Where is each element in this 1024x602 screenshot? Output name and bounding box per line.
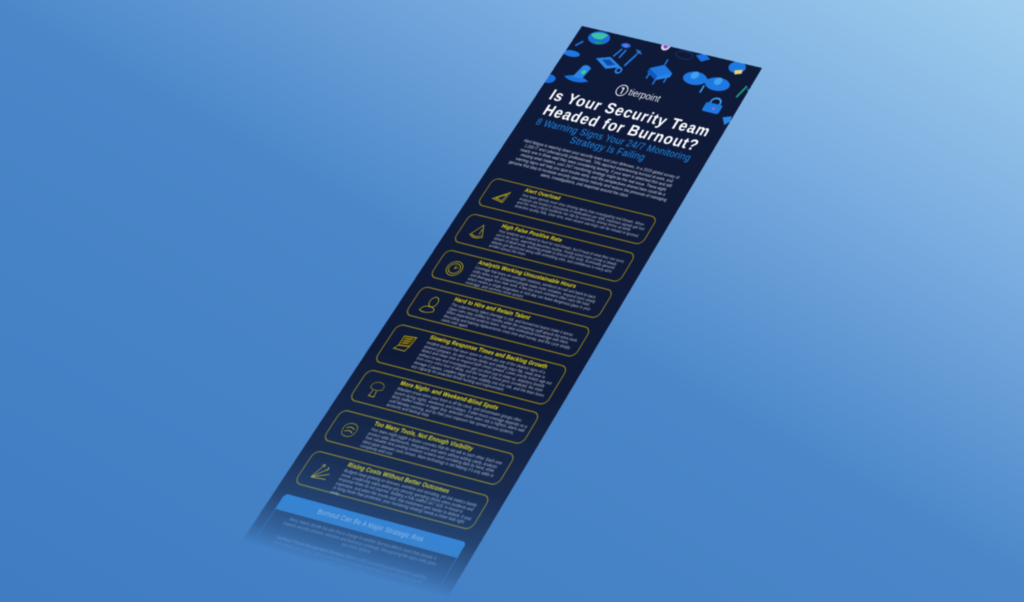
card heading: Alert Overload (523, 187, 562, 201)
card text: Your analysts are trained to hunt for real threats, but if most of what they see turns out to be noise, searching becomes routine. Poorly tuned rules create a steady stream of dead ends, teaching people to distrust their tools. Eventually genuine attacks get dismissed along with everything else, and confidence in every alert erodes across the team. (488, 229, 625, 274)
icon: cut-off device on left edge (544, 74, 556, 84)
card 4: hard to hire and retain talent (404, 285, 592, 358)
icon: spreading arrows (310, 464, 330, 480)
section text: TierPoint Threat Management Services deliver a 24/7 monitoring and response capability that extends your team, reduces alert fatigue and gives your analysts room to focus on the work that matters most. (272, 535, 428, 585)
card text: Incident queues that never seem to shrink are one of the clearest signs of a strained program. As alert volume climbs and staffing stays flat, mean time to detect and mean time to respond both creep upward. Lower priority tickets age out without review and investigations get cut short just to keep up. Attackers benefit from every extra hour of delay, and the longer a threat goes unnoticed, the more damage it causes. Leaders begin to lose visibility into true risk, and the team loses any capacity for proactive threat hunting and improvement. (410, 340, 553, 398)
section text: Many teams decide too late that a change is needed. Burnout affects more than people; it impacts security posture, retention and business continuity. Recognizing the signs early gives you more options. (282, 517, 438, 567)
subtitle: 8 Warning Signs Your 24/7 Monitoring (534, 116, 694, 163)
card 3: analysts working unsustainable hours (429, 249, 615, 319)
icon: warning triangle (491, 191, 512, 204)
card heading: Analysts Working Unsustainable Hours (477, 259, 578, 289)
icon: pink ring at top (660, 44, 671, 52)
icon: document with magnifier (596, 56, 624, 74)
banner: burnout strategic risk: Burnout Can Be A Major Strategic Risk (316, 507, 426, 543)
banner: burnout strategic risk (275, 493, 467, 558)
card text: The cybersecurity talent shortage is real, and burned-out teams make it worse. Open roles stay unfilled for months while the remaining staff absorb the extra work. When experienced analysts leave, they take institutional knowledge with them. Recruiting and training replacements costs time and money, and the cycle simply starts over again. (440, 302, 579, 350)
card heading: More Night- and Weekend-Blind Spots (399, 380, 500, 411)
icon: head and shoulders (418, 296, 440, 314)
icon: brain tangle (340, 422, 359, 438)
icon: clock (445, 260, 464, 277)
panel: strategic risk section (252, 493, 467, 594)
card 8: rising costs (293, 450, 492, 531)
card heading: Too Many Tools, Not Enough Visibility (373, 420, 475, 452)
icon: laptop (392, 334, 418, 352)
icon: cloud with hand (564, 64, 592, 84)
icon: green and blue shield disc (587, 30, 611, 46)
icon: network server cluster (644, 58, 673, 86)
panel: infographic page in perspective (242, 26, 762, 598)
icon: faint navy outline shape (675, 50, 694, 60)
icon band: isometric security icons (544, 30, 750, 126)
card text: Your team spends more time clearing alerts than investigating real threats. When analysts are buried in thousands of notifications per shift, important signals get lost and the most critical incidents can slip by unnoticed, driving stress up while detection quality falls. Over time, even severe warnings can be missed or ignored. (514, 193, 646, 238)
card heading: Rising Costs Without Better Outcomes (346, 461, 451, 495)
card heading: High False Positive Rate (500, 223, 564, 244)
subtitle: Strategy Is Failing (568, 135, 648, 163)
card text: Attackers know when your team is off the clock, and ransomware groups often launch during nights, weekends and holidays. If after-hours coverage depends on a thinly staffed rotation or pager duty, detection slows when risk is highest. Alerts wait until Monday morning, and by then your exposure has spread across systems, accounts and backup data. (385, 386, 528, 435)
icon: pair of clouds (682, 70, 731, 94)
card 7: too many tools (322, 409, 517, 486)
card 6: night and weekend blind spots (348, 368, 541, 445)
card 5: slowing response times (373, 323, 569, 406)
title: Headed for Burnout? (540, 101, 703, 154)
icon: mushroom cloud (367, 381, 386, 398)
card text: Your team might juggle a dozen consoles that do not talk to each other. Each new product adds dashboards, integrations and alerts without adding clarity. Analysts lose valuable time pivoting between screens and correlating data by hand, while blind spots between tools remain. More technology is not helping if it only adds to complexity and cost. (359, 427, 503, 478)
card heading: Slowing Response Times and Backlog Growth (428, 334, 549, 370)
icon: right edge cube (722, 116, 732, 126)
card 2: high false positive rate (452, 213, 637, 283)
logo: tierpoint: tierpoint (626, 87, 663, 104)
icon: top cut-off tile (695, 53, 711, 62)
card text: Coverage that leans on overnight rotations, weekend on-call and back-to-back shifts takes a toll. Exhausted people make more mistakes, respond more slowly and disengage from their work. A few key team members often carry the load, which means a single resignation or sick day can leave dangerous gaps in your coverage, and recovery never arrives. (464, 265, 597, 312)
icon: small flat disc left (563, 40, 584, 58)
card heading: Hard to Hire and Retain Talent (453, 296, 532, 321)
intro paragraph: Alert fatigue is wearing down your security team and your defenses. In a 2023 global survey of 1,000 IT and cybersecurity professionals, 70% reported experiencing burnout at work, and nearly one in three said they were considering leaving. If your team is stretched thin and still missing what matters, your 24/7 monitoring strategy might be the real issue. These eight warning signs will help you spot trouble early, and the perspectives shared here could be a genuine first step to increase security operations maturity and reduce the pressure of managing alerts, investigations, and response around the clock. (508, 139, 680, 202)
icon: cone (468, 224, 485, 240)
icon: right edge figure (735, 85, 750, 98)
card 1: alert overload (476, 177, 658, 245)
icon: padlock (702, 96, 723, 115)
card text: Budgets keep growing on licenses, overtime and recruiting, yet risk metrics barely move. Leadership starts asking why security spending climbs when incidents and response times do not improve. Building a fully staffed 24/7 SOC in-house is expensive, and when the results stall, that investment gets harder to defend. If cost is rising faster than protection, your monitoring strategy needs a closer look right away. (329, 468, 478, 525)
icon: person with tools (624, 49, 643, 68)
icon: figure with pink marker (613, 42, 632, 59)
title: Is Your Security Team (546, 86, 715, 140)
icon: blue cloud with yellow envelope (728, 61, 747, 76)
logo: tierpoint (614, 84, 662, 103)
